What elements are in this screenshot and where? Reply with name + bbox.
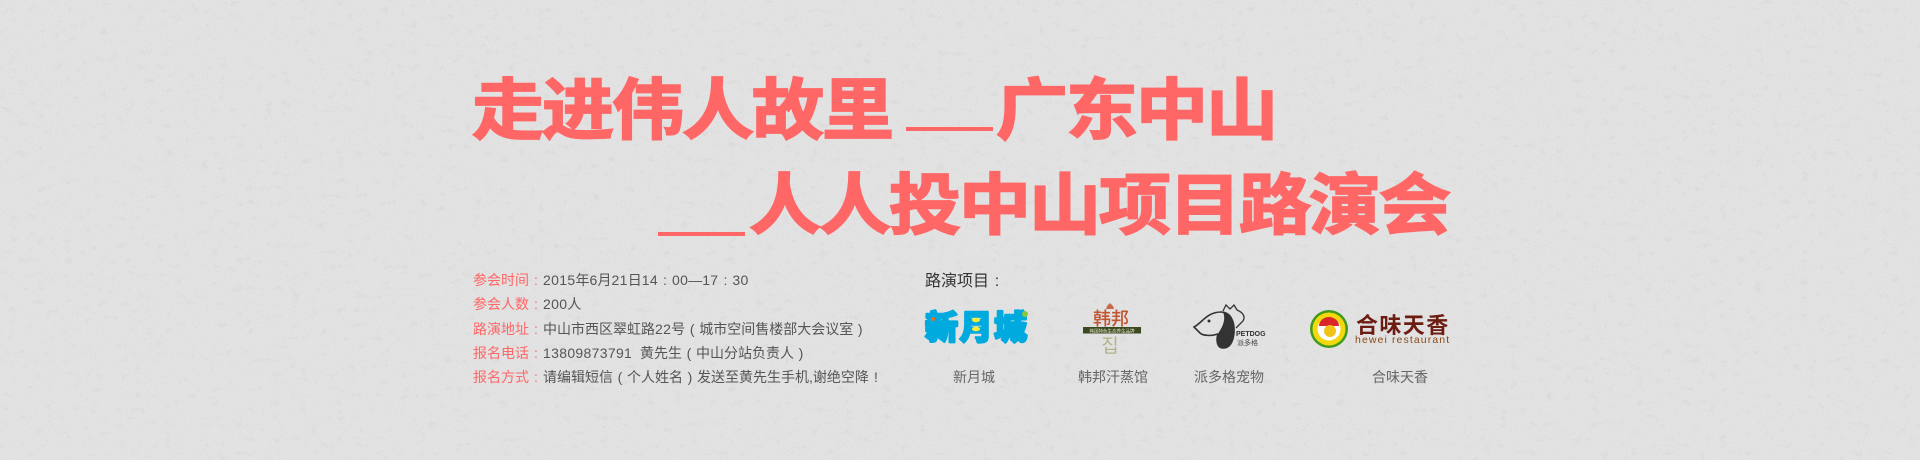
detail: time: 参会时间 2015年6月21日14 00—17 30 [473,272,749,288]
title text: 广东中山: 广东中山 [996,56,1276,153]
logo: 合味天香: hewei restaurant [1355,334,1450,346]
logo: 韩邦 [1083,303,1141,356]
detail: signup method: ) [688,369,692,385]
heading: roadshow projects: 路演项目 [925,273,989,290]
detail: address: 路演地址 中山市西区翠虹路22号 城市空间售楼部大会议室 [473,321,853,337]
detail: attendance: 参会人数 200人 [473,296,581,312]
label: 合味天香: 合味天香 [1372,369,1428,385]
detail: phone: 报名电话 13809873791 黄先生 中山分站负责人 [473,345,794,361]
title dash [906,127,993,131]
label: 派多格宠物: 派多格宠物 [1194,369,1264,385]
detail: attendance: : [534,296,538,312]
logo: 合味天香: 合味天香 [1356,308,1450,340]
text block: event details [473,272,878,385]
logo: 派多格 dog and cat [1192,304,1266,349]
detail: signup method: 报名方式 请编辑短信 个人姓名 发送至黄先生手机,谢绝空降 [473,369,869,385]
logo: 韩邦: 韩国特色生态养生品牌 [1090,328,1135,334]
title text: 走进伟人故里: 走进伟人故里 [472,56,892,153]
detail: phone: ) [799,345,803,361]
logo: 派多格 dog and cat: 派多格 [1237,338,1258,348]
title: first line [472,56,1276,153]
detail: time: : [534,272,538,288]
detail: address: ( [690,321,695,337]
logo: 派多格 dog and cat: PETDOG [1236,331,1266,338]
detail: phone: ( [687,345,691,361]
detail: time: : [723,272,727,288]
title text: 人人投中山项目路演会: 人人投中山项目路演会 [749,151,1449,248]
label: 新月城: 新月城 [953,369,995,385]
detail: signup method: ( [618,369,622,385]
logo: 韩邦: 韩邦 [1093,305,1129,331]
detail: phone: : [534,345,538,361]
detail: signup method: : [534,369,538,385]
heading: roadshow projects: : [995,273,999,290]
detail: address: ) [858,321,863,337]
title: second line [658,151,1452,248]
label: 韩邦汗蒸馆: 韩邦汗蒸馆 [1078,369,1148,385]
title dash [658,232,745,236]
detail: time: : [663,272,667,288]
detail: signup method: ! [874,369,878,385]
detail: address: : [534,321,538,337]
logo: 合味天香 [1310,308,1450,348]
